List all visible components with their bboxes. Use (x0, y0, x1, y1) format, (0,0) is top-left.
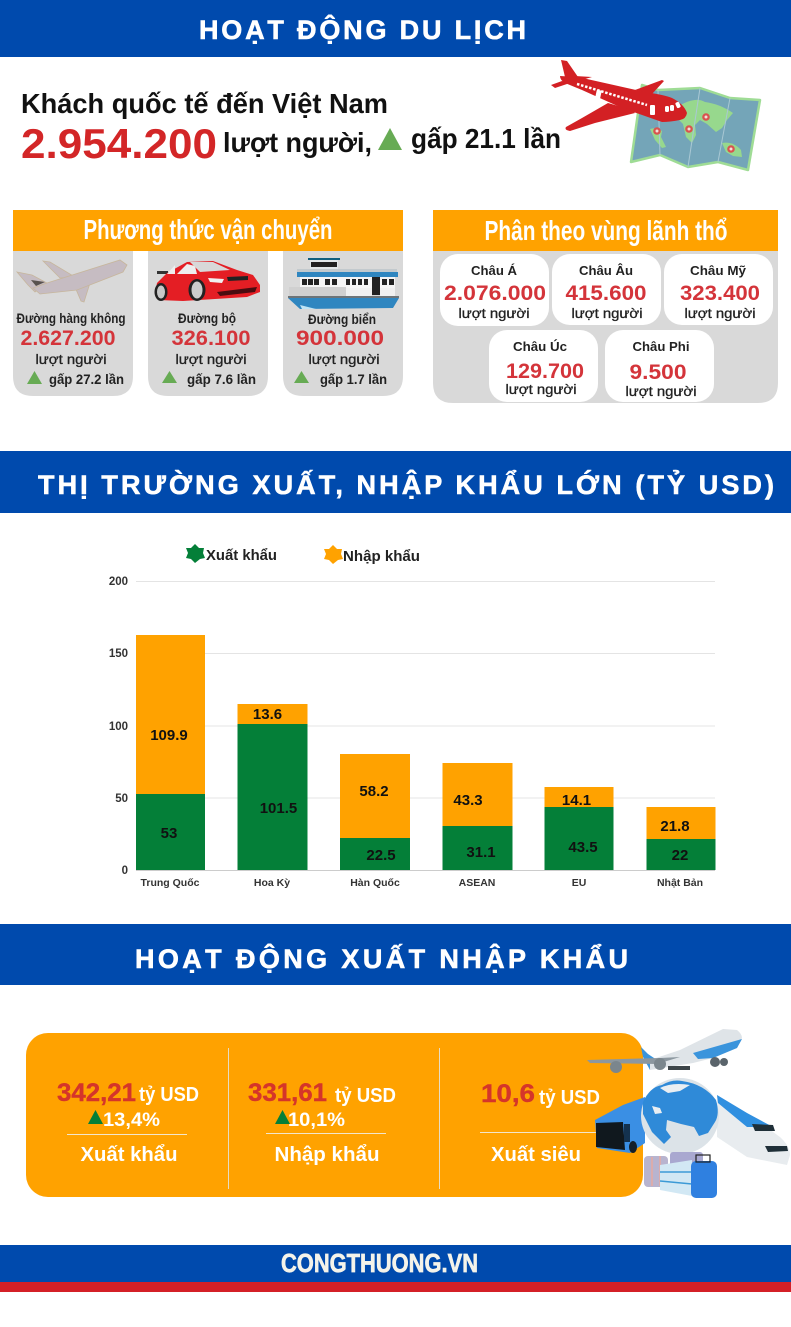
stat: trade surplus: tỷ USD (539, 1087, 600, 1109)
icon: ferry boat (288, 258, 399, 309)
card: Africa (605, 330, 714, 402)
header: major export import markets: THỊ TRƯỜNG XUẤT, NHẬP KHẨU LỚN (TỶ USD) (38, 468, 774, 500)
bar: Hoa Kỳ: 101.5 (260, 800, 297, 817)
headline: international visitors (21, 88, 561, 167)
bar: Trung Quốc: 53 (161, 825, 177, 842)
icon: passenger jet (17, 260, 127, 302)
icon: bus (595, 1097, 645, 1153)
bar: Hàn Quốc (340, 754, 410, 870)
bar: ASEAN: 43.3 (453, 792, 483, 809)
card: Europe: 415.600 (566, 282, 646, 305)
card: Asia (440, 254, 549, 326)
y axis labels (109, 576, 128, 877)
headline: international visitors: 2.954.200 (21, 120, 217, 167)
header: export import activity: HOẠT ĐỘNG XUẤT NHẬP KHẨU (135, 943, 628, 974)
header: tourism activity (0, 0, 791, 57)
stat: trade surplus: 10,6 (481, 1080, 535, 1108)
icon: luggage (644, 1152, 717, 1198)
x axis labels: EU (572, 877, 586, 889)
bar: Nhật Bản: 22 (672, 847, 688, 864)
legend (186, 544, 420, 565)
bar: EU: 14.1 (562, 792, 591, 809)
footer: CONGTHUONG.VN (281, 1248, 478, 1278)
y axis labels: 200 (109, 576, 128, 588)
bar: Hàn Quốc: 22.5 (366, 847, 396, 864)
x axis labels (141, 877, 703, 889)
stat: imports (248, 1079, 396, 1166)
stacked bar chart (109, 576, 716, 889)
card: air: lượt người (36, 352, 107, 367)
card: America: Châu Mỹ (690, 263, 747, 278)
bar: EU: 43.5 (568, 839, 598, 856)
stat: exports: 342,21 (57, 1079, 136, 1107)
headline: international visitors: lượt người, (223, 127, 372, 158)
panel heading: transport modes (13, 210, 403, 251)
stat: exports: tỷ USD (139, 1084, 199, 1106)
stat: trade surplus: Xuất siêu (491, 1144, 581, 1166)
bar: ASEAN: 31.1 (466, 844, 496, 861)
card: sea: Đường biển (308, 312, 376, 327)
panel heading: by region (433, 210, 778, 251)
card: road: 326.100 (172, 327, 250, 350)
stat: exports: Xuất khẩu (80, 1144, 178, 1166)
card: Asia: 2.076.000 (444, 282, 546, 305)
panel heading: transport modes: Phương thức vận chuyển (84, 214, 332, 245)
card: Europe: Châu Âu (579, 263, 633, 278)
stat: exports: 13,4% (103, 1110, 160, 1131)
bar: Hàn Quốc: 58.2 (359, 783, 389, 800)
x axis labels: Nhật Bản (657, 877, 703, 889)
legend item: export (186, 544, 277, 564)
icon: train (717, 1095, 790, 1165)
icon: airplane (587, 1029, 742, 1073)
footer (0, 1245, 791, 1292)
card: America: 323.400 (680, 282, 760, 305)
bar: Nhật Bản: 21.8 (660, 818, 690, 835)
bar: EU (544, 787, 614, 870)
card: Europe: lượt người (572, 306, 643, 321)
card: Oceania: lượt người (506, 382, 577, 397)
card: road: gấp 7.6 lần (187, 371, 256, 387)
x axis labels: Trung Quốc (141, 877, 200, 889)
card: sea (283, 251, 403, 396)
card: Asia: Châu Á (471, 263, 518, 278)
card: America (664, 254, 773, 325)
stat: imports: 331,61 (248, 1079, 327, 1107)
bar: Hoa Kỳ (238, 704, 308, 870)
y axis labels: 150 (109, 648, 128, 660)
x axis labels: Hàn Quốc (350, 877, 400, 889)
stat: trade surplus (480, 1080, 600, 1166)
bar: Nhật Bản (646, 807, 716, 870)
card: Africa: lượt người (626, 384, 697, 399)
card: air: Đường hàng không (16, 311, 126, 326)
card: Europe (552, 254, 661, 325)
x axis labels: Hoa Kỳ (254, 877, 290, 889)
y axis labels: 50 (115, 793, 128, 805)
card: air (13, 251, 133, 396)
stat: exports (57, 1079, 199, 1166)
header: export import activity (0, 924, 791, 985)
card: road: Đường bộ (178, 311, 236, 326)
stat: imports: tỷ USD (335, 1085, 396, 1107)
header: tourism activity: HOẠT ĐỘNG DU LỊCH (199, 14, 526, 45)
card: Oceania: Châu Úc (513, 339, 567, 354)
bar: ASEAN (442, 763, 512, 870)
bar: Trung Quốc: 109.9 (150, 727, 188, 744)
y axis labels: 100 (109, 721, 128, 733)
card: road: lượt người (176, 352, 247, 367)
card: Oceania: 129.700 (506, 360, 584, 383)
icon: red airplane (551, 60, 687, 131)
headline: international visitors: Khách quốc tế đến Việt Nam (21, 88, 388, 119)
legend item: import (324, 545, 420, 565)
card: Oceania (489, 330, 598, 402)
card: America: lượt người (684, 306, 756, 321)
y axis labels: 0 (122, 865, 128, 877)
panel: transport modes (13, 210, 403, 396)
card: sea: lượt người (308, 352, 380, 367)
card: road (148, 251, 268, 396)
legend item: export: Xuất khẩu (206, 548, 277, 564)
x axis labels: ASEAN (459, 877, 495, 889)
icon: world map (631, 85, 760, 170)
icon: red car (154, 261, 260, 301)
card: sea: gấp 1.7 lần (320, 371, 387, 387)
stat: imports: Nhập khẩu (274, 1144, 380, 1166)
card: Africa: 9.500 (630, 361, 686, 384)
card: air: gấp 27.2 lần (49, 371, 124, 387)
card: Africa: Châu Phi (632, 339, 690, 354)
headline: international visitors: gấp 21.1 lần (411, 123, 561, 154)
panel: visitors by region (433, 210, 778, 403)
stat: imports: 10,1% (288, 1110, 345, 1131)
card: Asia: lượt người (458, 306, 530, 321)
bar: Hoa Kỳ: 13.6 (253, 706, 282, 723)
panel: export import summary (26, 1033, 643, 1197)
legend item: import: Nhập khẩu (343, 549, 420, 565)
icon: globe (641, 1078, 719, 1154)
bar: Trung Quốc (136, 635, 205, 870)
card: air: 2.627.200 (20, 327, 116, 350)
card: sea: 900.000 (296, 327, 384, 350)
header: major export import markets (0, 451, 791, 513)
icon: globe with transport (587, 1029, 790, 1198)
